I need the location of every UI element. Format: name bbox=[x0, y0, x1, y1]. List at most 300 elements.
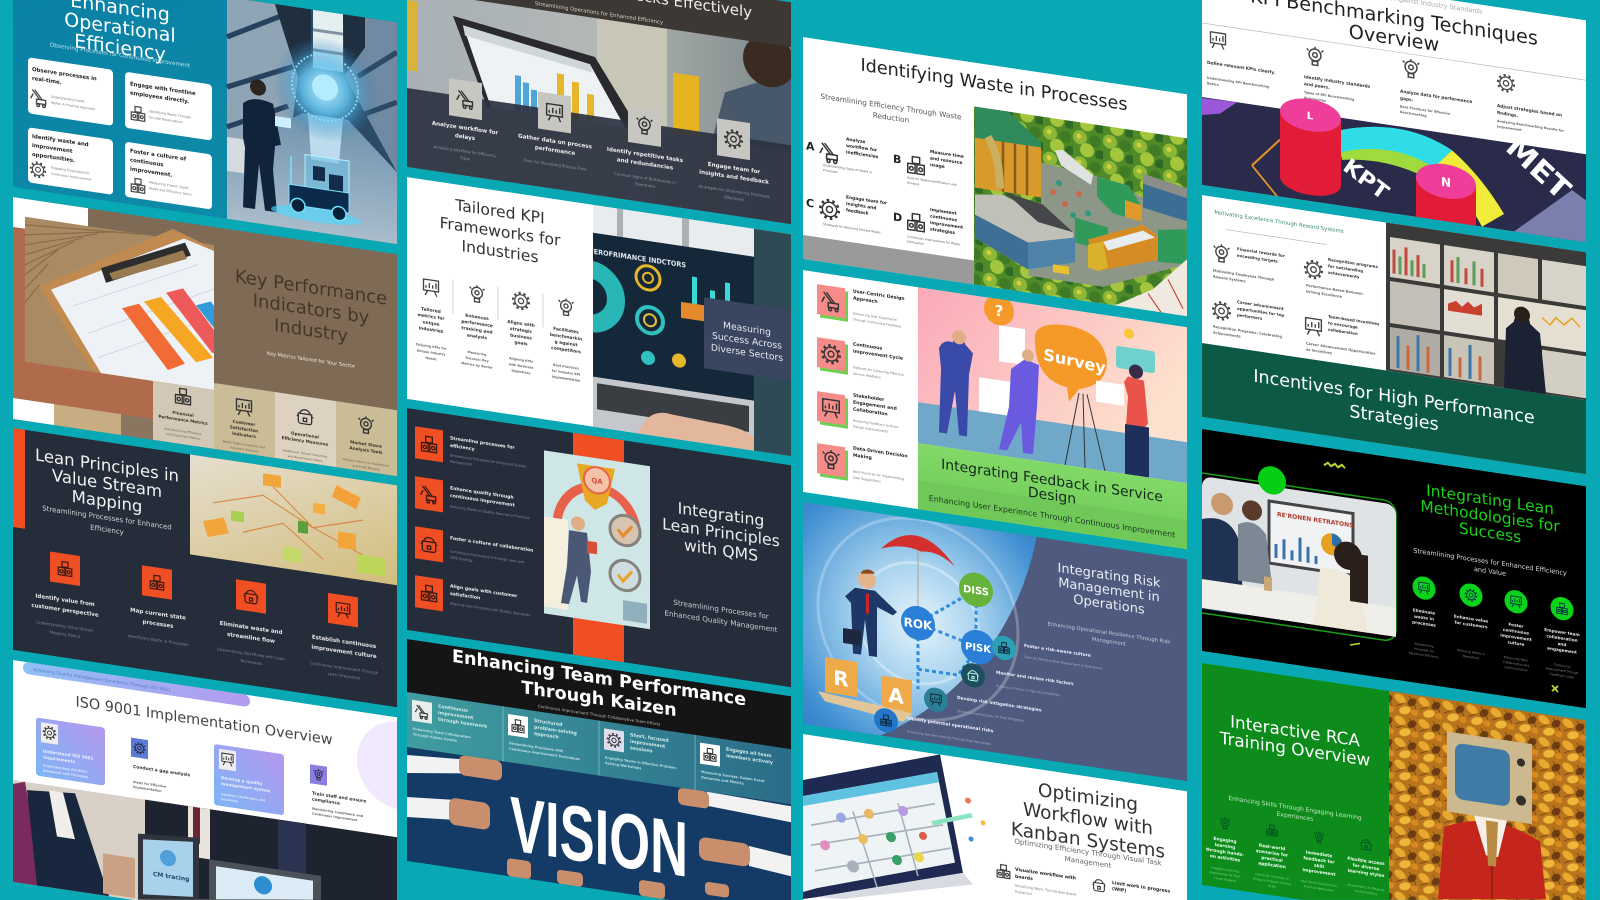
item: define KPIs: Define relevant KPIs clearly. bbox=[1207, 60, 1276, 76]
item: facilitates benchmarking: g against bbox=[554, 339, 578, 348]
item D: Elimination bbox=[907, 240, 924, 246]
heading: Integrating Lean Principles with QMS: Lean Principles bbox=[662, 514, 780, 551]
image: team with CM tracing laptops bbox=[13, 780, 397, 900]
item: visualize workflow: boards bbox=[1015, 874, 1033, 882]
card: observe processes: real-time. bbox=[32, 76, 62, 86]
item C: Engage team for bbox=[846, 194, 888, 207]
column: problem solving: Structured bbox=[534, 718, 563, 728]
image: value stream map with sticky notes bbox=[190, 454, 397, 585]
card: identify waste bbox=[28, 127, 113, 195]
callout: Measuring Success Across Diverse Sectors: Success Across bbox=[712, 330, 782, 352]
item: market share: and Profit Margins bbox=[352, 464, 380, 472]
column: all team members: Outcomes and Metrics bbox=[701, 775, 744, 786]
item: operational efficiency: Operational bbox=[291, 430, 319, 440]
item: develop mitigation bbox=[924, 686, 1042, 728]
card: engage frontline: employees directly. bbox=[130, 90, 189, 105]
item: financial rewards: Financial rewards for bbox=[1237, 246, 1285, 258]
step: identify value: customer perspective bbox=[31, 603, 99, 619]
step: analyze workflow: delays bbox=[455, 133, 476, 142]
item B: and resource bbox=[930, 155, 962, 166]
item: immediate feedback: Practical Application bbox=[1304, 884, 1334, 893]
item: align goals: Align goals with customer bbox=[450, 583, 518, 600]
subtitle: Enhancing User Experience Through Continuous Improvement bbox=[929, 494, 1175, 539]
item: immediate feedback: improvement bbox=[1303, 867, 1335, 878]
left white panel bbox=[407, 177, 593, 427]
item: career advancement: Career advancement bbox=[1237, 299, 1284, 311]
image: team reviewing retention dashboard bbox=[1192, 472, 1396, 642]
step: gather data: Tools for Visualizing Process Flow bbox=[523, 157, 586, 172]
panel: Integrating Risk Management in Operations slide bbox=[392, 57, 1187, 825]
image: KPI cylinders on a dark board: N bbox=[1441, 175, 1451, 190]
item: empower team: Empower team bbox=[1544, 627, 1580, 637]
item: flexible access: for diverse bbox=[1353, 862, 1379, 872]
panel: Integrating Lean Principles with QMS slide bbox=[407, 408, 791, 687]
subtitle: Experiences bbox=[1277, 811, 1313, 823]
step: identify repetitive tasks: Operations bbox=[635, 181, 655, 189]
item: stakeholder engagement: Analyzing Feedback to Drive bbox=[853, 418, 898, 429]
item: immediate feedback: Real-World Scenarios for bbox=[1301, 879, 1338, 888]
item: financial metrics: Financial bbox=[172, 410, 194, 418]
item: enhance value: Enhance value bbox=[1454, 614, 1488, 624]
item: customer satisfaction: Satisfaction bbox=[230, 424, 258, 434]
panel: Incentives for High Performance Strategies slide bbox=[1202, 195, 1586, 474]
step: map current state: processes bbox=[143, 619, 174, 630]
item: real-world scenarios: Real-world bbox=[1259, 842, 1285, 852]
item: gap analysis: Steps for Effective bbox=[133, 780, 167, 789]
card: understand requirements: requirements bbox=[43, 754, 75, 764]
item: financial rewards bbox=[1213, 243, 1285, 289]
item B: Analysis bbox=[907, 181, 920, 186]
item: identify operational risks: Enhancing Decision-Making Through Risk Awareness bbox=[907, 730, 991, 746]
item C bbox=[806, 188, 888, 236]
item: train staff: Train staff and ensure bbox=[312, 791, 366, 805]
heading: Key Performance Indicators by Industry: Indicators by bbox=[253, 290, 370, 329]
item: user-centric design: Through Continuous Feedback bbox=[852, 317, 902, 329]
item: continuous improvement cycle: Improvement Cycle bbox=[853, 348, 903, 362]
item B: Tools for Waste Identification and bbox=[906, 175, 957, 187]
item: monitor risk factors: Monitor and review risk factors bbox=[996, 670, 1074, 687]
column: all team members: members actively bbox=[726, 753, 773, 766]
item: data-driven decisions: Making bbox=[853, 452, 872, 461]
item: develop mitigation: Develop risk mitigation strategies bbox=[957, 695, 1042, 714]
column: problem solving: problem-solving bbox=[534, 724, 577, 737]
item: gap analysis: Conduct a gap analysis bbox=[133, 764, 191, 778]
item: facilitates benchmarking: for Industry KPI bbox=[552, 369, 580, 377]
card: observe processes: Walks: A Practical Approach bbox=[51, 101, 95, 111]
heading: Lean Principles in Value Stream Mapping: Mapping bbox=[72, 487, 142, 516]
heading: Integrating Lean Methodologies for Success: Integrating Lean bbox=[1426, 481, 1554, 518]
item: empower team: Continuous bbox=[1554, 662, 1571, 669]
item: stakeholder engagement: Stakeholder bbox=[853, 392, 885, 403]
step: eliminate waste: Streamlining Workflows with Lean bbox=[217, 646, 285, 662]
item: train staff: compliance bbox=[312, 797, 340, 807]
decorative zigzag bbox=[1324, 462, 1345, 468]
item: immediate feedback: feedback for bbox=[1303, 855, 1335, 866]
item: financial metrics: Performance Metrics bbox=[158, 414, 208, 426]
item: identify operational risks bbox=[874, 707, 994, 748]
card: develop quality system bbox=[214, 744, 284, 815]
heading: Enhancing Operational Efficiency: Efficiency bbox=[74, 29, 166, 66]
image: survey discussion illustration: Survey bbox=[1043, 345, 1107, 377]
accent bar bbox=[573, 433, 624, 662]
callout: Measuring Success Across Diverse Sectors bbox=[704, 297, 791, 381]
card: develop quality system: Develop a quality bbox=[221, 775, 263, 786]
item B: Measure time bbox=[930, 149, 964, 160]
step: analyze workflow bbox=[432, 76, 498, 166]
image: KPI cylinders on a dark board bbox=[1202, 83, 1586, 242]
item: customer satisfaction: Indicators bbox=[232, 431, 256, 439]
item: foster improvement culture: improvement bbox=[1500, 632, 1532, 642]
decorative dash bbox=[1350, 642, 1360, 647]
item: adjust strategies: Adjust strategies based on bbox=[1497, 103, 1562, 119]
item: team-based incentives bbox=[1306, 310, 1380, 363]
item: recognition programs: for outstanding bbox=[1328, 263, 1363, 274]
column: problem solving bbox=[508, 714, 580, 761]
image: clipboard with bar chart bbox=[25, 207, 214, 390]
image: tablet with charts in a warehouse bbox=[407, 0, 795, 225]
image: KPI cylinders on a dark board: L bbox=[1307, 111, 1314, 123]
item: eliminate waste: Maximum Efficiency bbox=[1409, 651, 1439, 659]
item: customer satisfaction: Inventory Turnover bbox=[230, 445, 259, 454]
column: focused sessions: sessions bbox=[630, 745, 653, 755]
column: focused sessions: Engaging Teams in Effective Problem- bbox=[605, 756, 678, 770]
heading: Integrating Risk Management in Operations: Operations bbox=[1073, 592, 1145, 618]
heading: Lean Principles in Value Stream Mapping: Value Stream bbox=[52, 466, 162, 501]
card: engage frontline: On-Site Observations bbox=[149, 115, 183, 124]
item: facilitates benchmarking: Implementation bbox=[552, 375, 581, 383]
subtitle: Key Metrics Tailored for Your Sector bbox=[267, 351, 356, 370]
column: problem solving: approach bbox=[534, 731, 559, 741]
item: streamline processes: Management bbox=[450, 459, 473, 467]
card: observe processes: Observe processes in bbox=[32, 67, 97, 82]
item D: continuous bbox=[930, 213, 958, 224]
step: eliminate waste: Eliminate waste and bbox=[220, 621, 282, 636]
step: analyze workflow: Gaps bbox=[460, 155, 470, 161]
image: survey discussion illustration bbox=[918, 283, 1187, 483]
card: observe processes bbox=[28, 57, 113, 126]
image: QA poster with businessman bbox=[544, 450, 650, 629]
card: identify waste: Identify waste and bbox=[32, 134, 89, 148]
item: hands-on activities: Engaging bbox=[1213, 836, 1237, 845]
item: hands-on activities: Experiences for Root bbox=[1210, 870, 1241, 879]
item: empower team: and bbox=[1558, 641, 1566, 647]
item: tailored metrics bbox=[416, 278, 447, 363]
panel: Lean Principles in Value Stream Mapping slide bbox=[13, 428, 397, 707]
step: eliminate waste: streamline flow bbox=[227, 632, 275, 645]
item: foster improvement culture: Foster bbox=[1508, 622, 1524, 629]
panel: Optimizing Workflow with Kanban Systems slide bbox=[803, 734, 1187, 900]
heading: Tailored KPI Frameworks for Industries: Frameworks for bbox=[440, 213, 561, 250]
item: user-centric design: User-Centric Design bbox=[853, 288, 905, 302]
item: recognition programs: Recognition programs bbox=[1328, 257, 1378, 269]
item: data-driven decisions: Data-Driven Decision bbox=[853, 445, 908, 460]
heading: Integrating Lean Principles with QMS: Integrating bbox=[678, 498, 764, 530]
item: define KPIs: Understanding KPI Benchmarking bbox=[1207, 76, 1270, 89]
item: career advancement: performers bbox=[1237, 312, 1263, 321]
item: continuous improvement cycle: Continuous bbox=[853, 341, 882, 352]
item: analyze data: Analyze data for performance bbox=[1400, 89, 1472, 105]
item: real-world scenarios: Enhance Problem-Solving bbox=[1253, 877, 1291, 886]
item: career advancement bbox=[1213, 296, 1284, 345]
item: real-world scenarios: application bbox=[1258, 860, 1286, 870]
item: flexible access: Understanding bbox=[1355, 889, 1377, 896]
item: foster collaboration: QMS Synergy bbox=[450, 555, 473, 563]
heading: ISO 9001 Implementation Overview: ISO 9001 Implementation Overview bbox=[75, 694, 333, 749]
item: flexible access: Flexible access bbox=[1347, 856, 1385, 867]
item: recognition programs: Performance-Based Bonuses: bbox=[1306, 284, 1364, 296]
item: user-centric design: Enhancing User Experience bbox=[853, 311, 897, 322]
item: identify standards: Types of KPI Benchmarking bbox=[1304, 90, 1355, 102]
item: tailored metrics: Tailoring KPIs for bbox=[416, 342, 447, 351]
image: laptop performance dashboard: PEROFRIMANCE INDCTORS bbox=[589, 246, 686, 270]
item: identify operational risks: Identify potential operational risks bbox=[907, 716, 994, 734]
item: immediate feedback: skill bbox=[1314, 863, 1324, 870]
step: engage team: Strategies for Streamlining Processes bbox=[699, 183, 769, 199]
item: adjust strategies bbox=[1497, 74, 1564, 138]
item: tailored metrics: Tailored bbox=[421, 306, 441, 315]
item: continuous improvement cycle bbox=[817, 336, 904, 383]
step: identify value: Mapping Basics bbox=[49, 629, 81, 639]
item A bbox=[806, 130, 879, 180]
item: enhances performance: Enhances bbox=[465, 313, 489, 322]
image: risk diagram with umbrella and businessman: ROK bbox=[904, 615, 933, 633]
step: engage team: Engage team for bbox=[708, 162, 760, 176]
item: stakeholder engagement: Collaboration bbox=[853, 406, 888, 418]
item: career advancement: Recognition Programs: Celebrating bbox=[1213, 325, 1282, 339]
item: gap analysis: Implementation bbox=[133, 785, 162, 793]
step: establish culture: Establish continuous bbox=[312, 635, 377, 650]
panel: Integrating Lean Methodologies for Success slide bbox=[1192, 428, 1586, 708]
item: recognition programs: achievements bbox=[1328, 270, 1360, 280]
card: engage frontline bbox=[125, 72, 212, 141]
card: identify waste: improvement bbox=[32, 143, 73, 155]
item: hands-on activities: on activities bbox=[1210, 853, 1241, 864]
column: focused sessions: Short, focused bbox=[630, 732, 669, 744]
heading: KPI Benchmarking Techniques Overview: Overview bbox=[1349, 20, 1439, 56]
subtitle: Observing Processes for Continuous Improvement bbox=[50, 43, 191, 69]
heading: Lean Principles in Value Stream Mapping: Lean Principles in bbox=[35, 445, 179, 486]
step: establish culture: improvement culture bbox=[311, 644, 377, 660]
heading: Optimizing Workflow with Kanban Systems: Optimizing bbox=[1038, 780, 1138, 816]
item: enhances performance: Measuring bbox=[468, 350, 487, 357]
card: develop quality system: Solutions bbox=[221, 797, 238, 804]
panel: Identifying Bottlenecks Effectively slide bbox=[407, 0, 795, 225]
item: eliminate waste bbox=[1409, 574, 1439, 659]
heading: Optimizing Workflow with Kanban Systems: Workflow with bbox=[1023, 799, 1153, 840]
panel: Tailored KPI Frameworks slide bbox=[407, 177, 791, 456]
image: risk diagram with umbrella and businessman: DISS bbox=[963, 584, 989, 599]
image: tablet with kanban flow bbox=[803, 734, 986, 900]
item: enhances performance: Metrics by Sector bbox=[461, 361, 493, 370]
item: eliminate waste: waste in bbox=[1414, 614, 1434, 622]
item: eliminate waste: processes bbox=[1412, 619, 1436, 628]
panel: Interactive RCA Training Overview slide bbox=[1202, 663, 1586, 900]
panel: Integrating Feedback in Service Design slide bbox=[803, 266, 1187, 549]
item: facilitates benchmarking: benchmarkin bbox=[550, 332, 582, 343]
item: foster improvement culture: culture bbox=[1508, 640, 1525, 647]
card: identify waste: Engaging Employees for bbox=[51, 166, 90, 176]
item: flexible access bbox=[1347, 837, 1385, 897]
item: train staff bbox=[310, 764, 366, 824]
item: hands-on activities: learning bbox=[1215, 842, 1235, 851]
image: risk diagram with umbrella and businessman: A bbox=[888, 683, 904, 709]
item: user-centric design bbox=[817, 283, 905, 330]
item: tailored metrics: metrics for bbox=[417, 312, 445, 322]
item: identify standards: Approaches bbox=[1304, 96, 1326, 103]
item: career advancement: opportunities for top bbox=[1237, 306, 1284, 318]
item: recognition programs bbox=[1305, 253, 1378, 304]
image: KPI cylinders on a dark board: MET bbox=[1499, 131, 1577, 207]
item: align goals: satisfaction bbox=[450, 591, 480, 601]
item: foster risk-aware culture: Foster a risk-aware culture bbox=[1024, 643, 1091, 659]
item: enhance quality: continuous improvement bbox=[450, 493, 515, 509]
heading: Integrating Risk Management in Operations: Management in bbox=[1058, 576, 1160, 606]
column: all team members: Engages all team bbox=[726, 747, 772, 759]
item: develop mitigation: Streamlining Processes for Risk Mitigation bbox=[957, 709, 1024, 723]
top title band bbox=[474, 0, 791, 48]
item: financial metrics bbox=[158, 385, 208, 442]
item: team-based incentives: as Incentives bbox=[1306, 348, 1332, 355]
subtitle: Streamlining Processes for Enhanced bbox=[42, 503, 172, 532]
item: financial metrics: Manufacturing Efficiency bbox=[165, 427, 202, 436]
panel: KPI Benchmarking Techniques Overview slide bbox=[1202, 0, 1586, 242]
item: tailored metrics: unique bbox=[423, 319, 439, 328]
item: customer satisfaction: Retail: Sales Conversion and bbox=[223, 439, 265, 450]
subtitle: Enhancing Operational Resilience Through Risk bbox=[1048, 621, 1170, 646]
card: observe processes: Understanding Gantt bbox=[51, 95, 85, 104]
item: train staff: Continuous Improvement bbox=[312, 812, 358, 822]
column: problem solving: Continuous Improvement Techniques bbox=[509, 747, 580, 761]
step: engage team bbox=[699, 115, 769, 206]
item: empower team: Improvement through bbox=[1546, 666, 1578, 675]
heading: Tailored KPI Frameworks for Industries: Tailored KPI bbox=[454, 195, 545, 227]
item: eliminate waste: Eliminate bbox=[1413, 607, 1435, 616]
card: understand requirements: Standards and Principles bbox=[43, 768, 88, 779]
item: empower team: Feedback Loops bbox=[1550, 672, 1574, 679]
card: foster culture: improvement. bbox=[130, 166, 172, 179]
item: foster improvement culture: Collaboration and bbox=[1503, 660, 1529, 668]
item: enhance value: Operations bbox=[1463, 654, 1480, 660]
step: identify repetitive tasks bbox=[607, 102, 684, 193]
subtitle: Optimizing Efficiency Through Visual Task bbox=[1014, 837, 1163, 868]
item: aligns with goals bbox=[507, 291, 535, 376]
item: visualize workflow: Visualize workflow with bbox=[1015, 867, 1076, 882]
item: continuous improvement cycle: Service Feedback bbox=[853, 371, 881, 380]
item: user-centric design: Approach bbox=[853, 295, 878, 305]
item: enhances performance: Success: Key bbox=[465, 356, 490, 363]
item: real-world scenarios: practical bbox=[1261, 855, 1283, 864]
subtitle: Management bbox=[1092, 637, 1126, 648]
item: monitor risk factors: Building a Culture of Risk Accountability bbox=[996, 684, 1060, 697]
item: tailored metrics: Unique Industry bbox=[417, 348, 446, 357]
heading: Interactive RCA Training Overview: Interactive RCA bbox=[1230, 711, 1360, 751]
item: foster risk-aware culture: Tools for Effective Risk Assessment in Operations bbox=[1023, 655, 1103, 671]
item D: Continuous Improvement for Waste bbox=[907, 235, 960, 246]
item: define KPIs: Basics bbox=[1207, 81, 1219, 87]
column: teamwork: Continuous bbox=[438, 704, 468, 714]
footer grey bar bbox=[803, 235, 974, 284]
item: eliminate waste: Processes for bbox=[1414, 647, 1435, 654]
column: focused sessions bbox=[604, 728, 678, 776]
item D: Implement bbox=[930, 207, 957, 217]
lower dark band bbox=[407, 88, 791, 224]
item: enhance quality: Reducing Waste in Quality Assurance Practices bbox=[450, 504, 530, 520]
item: aligns with goals: strategic bbox=[510, 326, 532, 335]
item: identify standards bbox=[1304, 45, 1371, 110]
step: gather data: performance bbox=[535, 145, 575, 157]
item: enhance value: for customers bbox=[1455, 620, 1488, 630]
item: visualize workflow: Explained bbox=[1015, 890, 1032, 896]
item: limit WIP bbox=[1092, 877, 1170, 900]
item: real-world scenarios: Skills bbox=[1268, 884, 1276, 889]
heading: Integrating Feedback in Service Design: Design bbox=[1028, 485, 1076, 508]
item: visualize workflow: Visualizing Work: The Kanban Board bbox=[1015, 884, 1076, 897]
card: engage frontline: Identifying Waste Through bbox=[149, 109, 191, 120]
heading: Integrating Lean Methodologies for Success: Success bbox=[1459, 519, 1521, 547]
panel: ISO 9001 Implementation Overview slide bbox=[13, 660, 397, 900]
item: aligns with goals: goals bbox=[514, 340, 528, 348]
item: market share: Finance: Return on Investment bbox=[343, 457, 390, 468]
card: understand requirements bbox=[36, 717, 105, 786]
footer band bbox=[918, 443, 1187, 549]
item: team-based incentives: Team-based incentives bbox=[1328, 314, 1380, 327]
subtitle: Enhanced Quality Management bbox=[664, 608, 778, 634]
item: limit WIP: Limit work in progress bbox=[1112, 880, 1170, 895]
item A: A bbox=[806, 140, 815, 154]
step: identify repetitive tasks: Common Signs of Bottlenecks in bbox=[614, 171, 676, 185]
card: understand requirements: Understand ISO 9001 bbox=[43, 748, 93, 761]
item: recognition programs: Driving Excellence bbox=[1306, 290, 1343, 299]
step: identify value: Understanding Value Stream bbox=[36, 619, 94, 633]
card: foster culture bbox=[125, 142, 212, 210]
item: identify standards: Identify industry standards bbox=[1304, 74, 1371, 90]
item: financial rewards: Motivating Employees Through bbox=[1213, 269, 1275, 282]
image: person with TV head in autumn leaves bbox=[1389, 691, 1586, 900]
card: understand requirements: Understanding ISO 9001: bbox=[43, 763, 88, 774]
item A: Processes bbox=[823, 168, 838, 174]
item: streamline processes: Streamlining Processes for Enhanced Quality bbox=[450, 453, 526, 469]
item: flexible access: learning styles bbox=[1348, 868, 1385, 879]
image: risk diagram with umbrella and businessman: PISK bbox=[965, 641, 992, 656]
heading: Incentives for High Performance Strategies: Strategies bbox=[1349, 402, 1439, 435]
item: enhances performance: performance bbox=[461, 319, 493, 329]
image: warehouse with glowing forklift bbox=[227, 0, 397, 244]
item: hands-on activities: Cause Analysis bbox=[1214, 876, 1237, 883]
item: operational efficiency bbox=[282, 406, 329, 464]
item: streamline processes: Streamline processes for bbox=[450, 435, 515, 451]
decorative green circle bbox=[1258, 464, 1286, 497]
item A: inefficiencies bbox=[846, 149, 879, 160]
step: establish culture bbox=[310, 590, 379, 683]
subtitle: Continuous Improvement Through Collaborative Team Efforts bbox=[538, 704, 660, 727]
item: align goals bbox=[415, 575, 530, 624]
item: analyze data: gaps. bbox=[1400, 97, 1414, 104]
item C: insights and bbox=[846, 201, 876, 211]
item: aligns with goals: with Business bbox=[509, 362, 534, 370]
step: establish culture: Continuous Improvement Through bbox=[310, 660, 379, 675]
heading: Key Performance Indicators by Industry: Industry bbox=[274, 315, 348, 347]
step: analyze workflow: Analyzing Workflow for Efficiency bbox=[434, 144, 497, 158]
item: streamline processes: efficiency bbox=[450, 443, 475, 453]
item C: feedback bbox=[846, 207, 870, 217]
step: identify repetitive tasks: Identify repetitive tasks bbox=[607, 147, 684, 164]
item: stakeholder engagement bbox=[817, 387, 898, 436]
image: laptop performance dashboard bbox=[562, 200, 791, 456]
column: teamwork: through teamwork bbox=[438, 717, 488, 730]
column: teamwork: Through Kaizen Events bbox=[413, 732, 457, 743]
image: survey discussion illustration: ? bbox=[995, 302, 1003, 321]
item: limit WIP: (WIP) bbox=[1112, 886, 1126, 894]
